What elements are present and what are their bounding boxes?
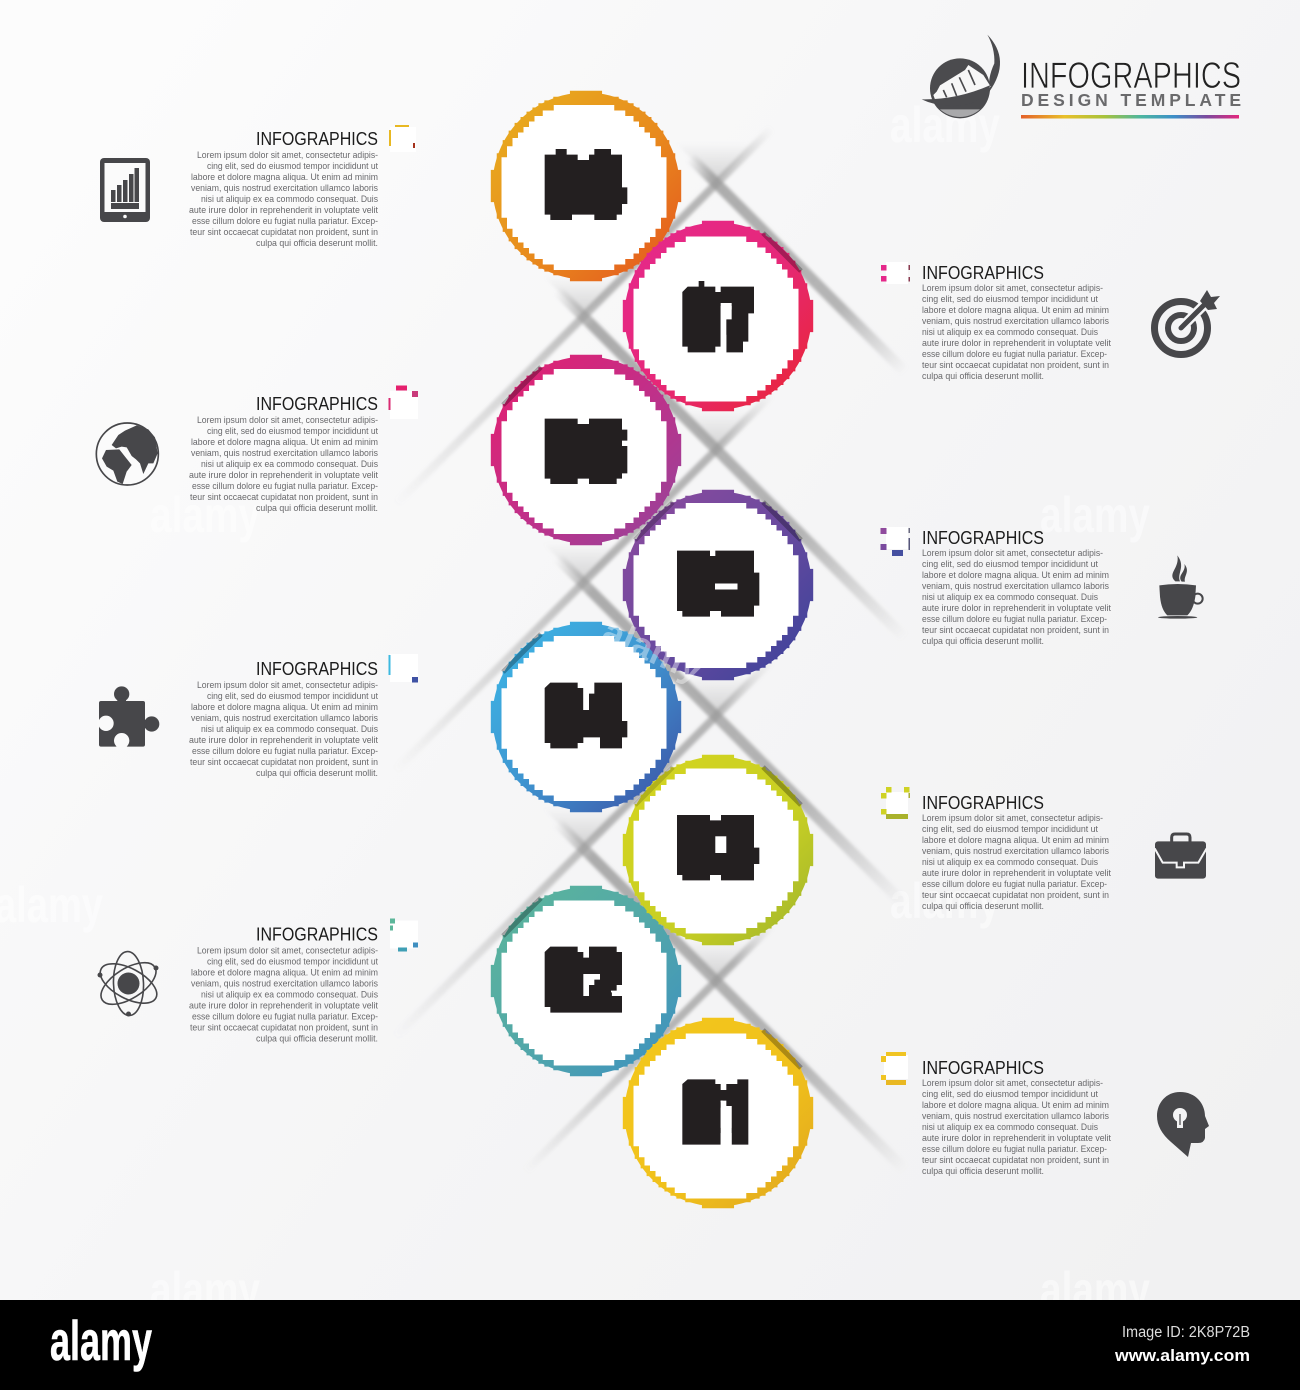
body text: cing elit, sed do eiusmod tempor incididunt ut [207,160,378,171]
heading: INFOGRAPHICS [922,263,1044,283]
body text: Lorem ipsum dolor sit amet, consectetur adipis- [922,282,1103,293]
body text: labore et dolore magna aliqua. Ut enim ad minim [191,436,378,447]
body text: nisi ut aliquip ex ea commodo consequat. Duis [922,326,1098,337]
body text [922,282,1111,381]
step circle 08: 08 [556,158,614,214]
body text: esse cillum dolore eu fugiat nulla pariatur. Excep- [922,613,1107,624]
body text: labore et dolore magna aliqua. Ut enim ad minim [922,304,1109,315]
heading: INFOGRAPHICS [922,528,1044,548]
step circle 05 [623,490,813,680]
body text: nisi ut aliquip ex ea commodo consequat. Duis [922,1121,1098,1132]
body text: culpa qui officia deserunt mollit. [922,1165,1044,1176]
body text: Lorem ipsum dolor sit amet, consectetur adipis- [197,149,378,160]
icon: coffee cup [1158,555,1203,619]
image id: Image ID: 2K8P72B [1122,1324,1250,1341]
body text: aute irure dolor in reprehenderit in voluptate velit [922,1132,1111,1143]
heading: INFOGRAPHICS [256,394,378,414]
step circle 01 [623,1018,813,1208]
body text: culpa qui officia deserunt mollit. [256,1032,378,1044]
body text: esse cillum dolore eu fugiat nulla pariatur. Excep- [192,1010,378,1022]
footer logo: alamy [50,1309,152,1372]
body text: veniam, quis nostrud exercitation ullamco laboris [191,978,378,988]
icon: globe [96,423,158,485]
body text: veniam, quis nostrud exercitation ullamco laboris [922,580,1109,591]
step circle 03: 03 [688,822,746,878]
body text [189,944,378,1044]
step circle 04 [491,622,681,812]
diagonal shadow lines [395,128,905,1172]
step circle 04: 04 [556,690,614,746]
body text: labore et dolore magna aliqua. Ut enim ad minim [191,171,378,182]
body text: labore et dolore magna aliqua. Ut enim ad minim [191,966,378,978]
icon: atom [94,951,163,1016]
step circle 02: 02 [556,953,614,1009]
body text: esse cillum dolore eu fugiat nulla pariatur. Excep- [192,215,378,226]
body text: veniam, quis nostrud exercitation ullamco laboris [922,845,1109,856]
body text: nisi ut aliquip ex ea commodo consequat. Duis [201,193,378,204]
body text: Lorem ipsum dolor sit amet, consectetur adipis- [197,679,378,690]
left block 08 [189,125,416,248]
watermarks [0,97,1150,1318]
body text: cing elit, sed do eiusmod tempor incididunt ut [922,823,1098,834]
right block 05 [880,527,1111,646]
watermarks: alamy [150,487,260,543]
body text: Lorem ipsum dolor sit amet, consectetur adipis- [922,812,1103,823]
body text: esse cillum dolore eu fugiat nulla pariatur. Excep- [922,348,1107,359]
footer url: www.alamy.com [1114,1346,1250,1365]
body text [922,1077,1111,1176]
body text [189,149,378,248]
left block 06 [189,386,418,513]
step circle 02 [491,886,681,1076]
icon: tablet chart [100,158,150,222]
body text: teur sint occaecat cupidatat non proident, sunt in [922,889,1109,900]
watermark over circles: alamy [597,610,709,690]
rainbow bar [1021,115,1239,118]
watermarks: alamy [890,873,1000,929]
body text: cing elit, sed do eiusmod tempor incididunt ut [922,558,1098,569]
body text: veniam, quis nostrud exercitation ullamco laboris [922,315,1109,326]
body text: Lorem ipsum dolor sit amet, consectetur adipis- [197,944,378,956]
body text: esse cillum dolore eu fugiat nulla pariatur. Excep- [922,878,1107,889]
body text: aute irure dolor in reprehenderit in voluptate velit [922,602,1111,613]
step circle 06 [491,355,681,545]
watermarks: alamy [150,1262,260,1318]
marker [881,1052,908,1085]
body text: teur sint occaecat cupidatat non proident, sunt in [190,491,378,502]
step circle 01: 01 [690,1088,740,1144]
marker [881,262,910,284]
body text: esse cillum dolore eu fugiat nulla pariatur. Excep- [192,480,378,491]
body text: culpa qui officia deserunt mollit. [256,237,378,248]
body text: aute irure dolor in reprehenderit in voluptate velit [189,734,378,745]
body text: aute irure dolor in reprehenderit in voluptate velit [189,469,378,480]
body text: Lorem ipsum dolor sit amet, consectetur adipis- [197,414,378,425]
body text: aute irure dolor in reprehenderit in voluptate velit [189,1000,378,1010]
heading: INFOGRAPHICS [256,129,378,149]
marker [880,527,910,556]
body text: culpa qui officia deserunt mollit. [256,767,378,778]
marker [390,918,418,952]
body text: culpa qui officia deserunt mollit. [922,370,1044,381]
body text: labore et dolore magna aliqua. Ut enim ad minim [922,1099,1109,1110]
step circle 03 [623,755,813,945]
body text: cing elit, sed do eiusmod tempor incididunt ut [922,1088,1098,1099]
body text: nisi ut aliquip ex ea commodo consequat. Duis [922,856,1098,867]
body text: cing elit, sed do eiusmod tempor incididunt ut [207,956,378,966]
icon: target with arrow [1154,290,1220,354]
heading: INFOGRAPHICS [256,924,378,944]
step circle 07: 07 [690,290,742,346]
right block 01 [881,1052,1111,1176]
body text: culpa qui officia deserunt mollit. [922,900,1044,911]
body text [922,547,1111,646]
body text: veniam, quis nostrud exercitation ullamco laboris [191,712,378,723]
body text: teur sint occaecat cupidatat non proident, sunt in [922,624,1109,635]
left block 02 [189,918,418,1044]
heading: INFOGRAPHICS [922,1058,1044,1078]
icon: head with light bulb [1157,1092,1209,1157]
marker [389,125,416,152]
icon: puzzle piece [97,686,159,749]
body text: Lorem ipsum dolor sit amet, consectetur adipis- [922,547,1103,558]
body text: aute irure dolor in reprehenderit in voluptate velit [189,204,378,215]
body text: esse cillum dolore eu fugiat nulla pariatur. Excep- [192,745,378,756]
right block 07 [881,262,1111,381]
body text: aute irure dolor in reprehenderit in voluptate velit [922,337,1111,348]
body text: teur sint occaecat cupidatat non proident, sunt in [190,756,378,767]
body text: aute irure dolor in reprehenderit in voluptate velit [922,867,1111,878]
body text: teur sint occaecat cupidatat non proident, sunt in [922,1154,1109,1165]
logo title: INFOGRAPHICS [1021,55,1241,96]
body text: labore et dolore magna aliqua. Ut enim ad minim [922,569,1109,580]
body text: veniam, quis nostrud exercitation ullamco laboris [922,1110,1109,1121]
icon: briefcase [1155,834,1207,879]
body text [189,679,378,778]
body text: labore et dolore magna aliqua. Ut enim ad minim [191,701,378,712]
body text: nisi ut aliquip ex ea commodo consequat. Duis [201,723,378,734]
step circle 07 [623,221,813,411]
body text: nisi ut aliquip ex ea commodo consequat. Duis [922,591,1098,602]
marker [881,787,910,819]
right block 03 [881,787,1111,911]
body text [922,812,1111,911]
body text: cing elit, sed do eiusmod tempor incididunt ut [207,425,378,436]
footer bar [0,1300,1300,1390]
body text: teur sint occaecat cupidatat non proident, sunt in [190,226,378,237]
body text: culpa qui officia deserunt mollit. [922,635,1044,646]
watermarks: alamy [1040,487,1150,543]
heading: INFOGRAPHICS [256,659,378,679]
body text [189,414,378,513]
body text: cing elit, sed do eiusmod tempor incididunt ut [922,293,1098,304]
body text: nisi ut aliquip ex ea commodo consequat. Duis [201,988,378,1000]
body text: esse cillum dolore eu fugiat nulla pariatur. Excep- [922,1143,1107,1154]
body text: labore et dolore magna aliqua. Ut enim ad minim [922,834,1109,845]
left block 04 [189,654,418,778]
body text: teur sint occaecat cupidatat non proident, sunt in [922,359,1109,370]
logo mark [922,35,1000,118]
body text: veniam, quis nostrud exercitation ullamco laboris [191,182,378,193]
body text: cing elit, sed do eiusmod tempor incididunt ut [207,690,378,701]
step circle 05: 05 [688,557,746,613]
marker [388,386,418,419]
step circle 08 [491,91,681,281]
watermarks: alamy [890,97,1000,153]
step circle 06: 06 [556,424,614,480]
watermarks: alamy [1040,1262,1150,1318]
body text: veniam, quis nostrud exercitation ullamco laboris [191,447,378,458]
logo subtitle: DESIGN TEMPLATE [1021,90,1241,110]
body text: nisi ut aliquip ex ea commodo consequat. Duis [201,458,378,469]
logo [922,35,1241,118]
body text: Lorem ipsum dolor sit amet, consectetur adipis- [922,1077,1103,1088]
body text: culpa qui officia deserunt mollit. [256,502,378,513]
marker [388,654,418,682]
heading: INFOGRAPHICS [922,793,1044,813]
body text: teur sint occaecat cupidatat non proident, sunt in [190,1022,378,1032]
